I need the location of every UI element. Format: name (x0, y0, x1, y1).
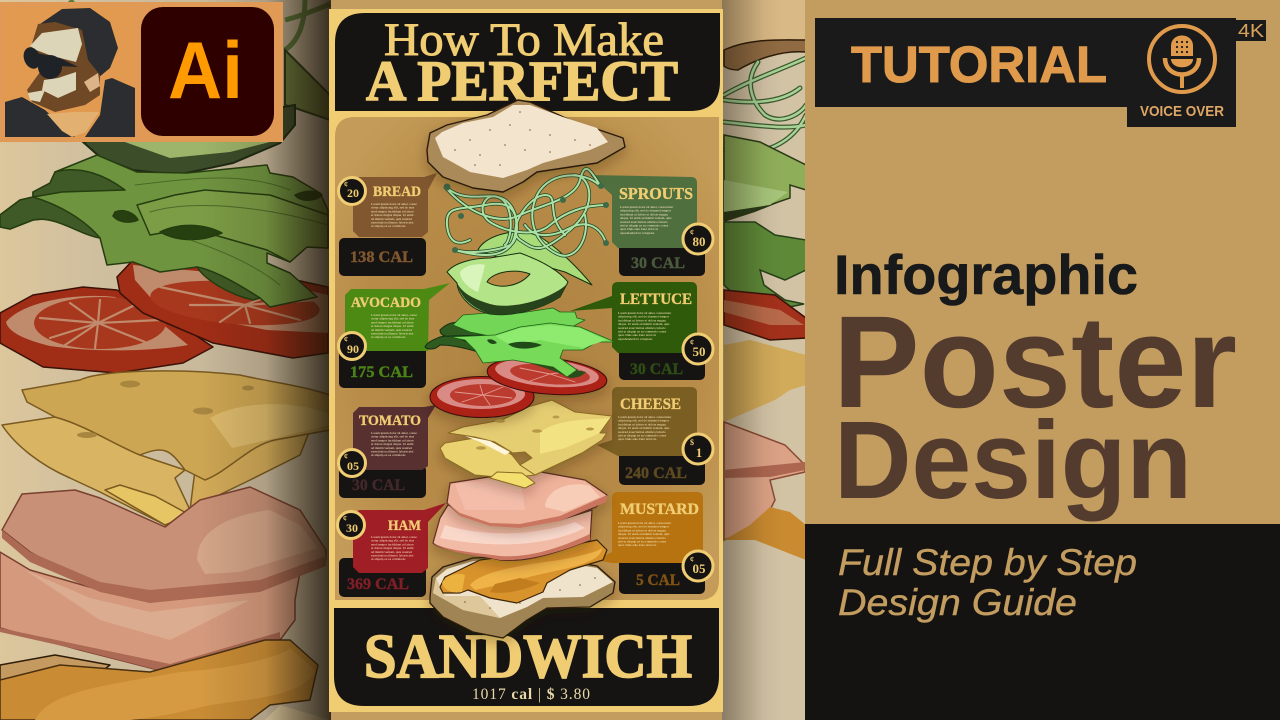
text block: tomato: ctetur adipiscing elit, sed do eius (371, 435, 415, 440)
ingredient: bread (338, 173, 437, 276)
icon: microphone (1149, 26, 1215, 92)
text block: ham: ut aliquip ex ea commodo. (371, 557, 406, 561)
price badge: cheese (683, 434, 713, 464)
text block: cheese: adipiscing elit, sed do eiusmod tempor (618, 419, 670, 424)
callout: cheese (597, 387, 697, 456)
text block: sprouts: incididunt ut labore et dolore magna (620, 212, 668, 216)
text block: lettuce: incididunt ut labore et dolore magna (618, 318, 666, 322)
text block: avocado: et dolore magna aliqua. Ut enim (371, 324, 414, 328)
text block: ham: exercitation ullamco laboris nisi (371, 554, 413, 558)
calorie box: ham: 369 CAL (347, 576, 409, 593)
illustration: avocado (724, 135, 806, 220)
heading: Poster: Poster (833, 288, 1237, 435)
text block: bread: exercitation ullamco laboris nisi (371, 220, 413, 224)
icon: Adobe Illustrator logo: Ai (168, 26, 243, 116)
price badge: cheese: $ (690, 438, 694, 447)
title line two: A PERFECT (366, 50, 678, 113)
price badge: cheese: 1 (696, 445, 702, 460)
label: lettuce: LETTUCE (620, 291, 692, 308)
text block: lettuce: nisi ut aliquip ex ea commodo conse (618, 330, 667, 334)
illustration: big mustard and bread (0, 640, 330, 720)
calorie box: sprouts: 30 CAL (631, 255, 685, 272)
text block: bread: et dolore magna aliqua. Ut enim (371, 213, 414, 217)
calorie box: avocado: 175 CAL (350, 364, 413, 381)
price badge: bread: 20 (347, 186, 359, 200)
text block: cheese: incididunt ut labore et dolore magna (618, 422, 666, 426)
callout: mustard (596, 492, 703, 563)
text block: lettuce: reprehenderit in voluptate. (618, 337, 653, 341)
illustration: top sprouts behind badge (70, 0, 330, 50)
ingredient: ham (338, 503, 446, 597)
text block: sprouts: nisi ut aliquip ex ea commodo conse (620, 224, 669, 228)
voice over label: VOICE OVER (1140, 103, 1224, 120)
illustration: mustard (440, 540, 607, 603)
callout: tomato (353, 405, 436, 470)
illustration: lettuce (724, 222, 806, 310)
price badge: ham: ¢ (343, 514, 347, 523)
title line one: How To Make (384, 14, 664, 66)
4K tag: 4K (1238, 21, 1264, 41)
text block: sprouts: quat. Duis aute irure dolor in (620, 227, 658, 231)
text block: lettuce: adipiscing elit, sed do eiusmod tempor (618, 315, 670, 320)
illustration: tomato slices (430, 353, 608, 418)
text block: cheese: aliqua. Ut enim ad minim veniam, quis (618, 426, 670, 431)
ingredient: mustard (596, 492, 713, 594)
label: tomato: TOMATO (359, 413, 421, 429)
price badge: avocado: 90 (347, 342, 359, 356)
callout: lettuce (570, 282, 697, 353)
text block: lettuce: quat. Duis aute irure dolor in (618, 333, 656, 337)
price badge: lettuce: ¢ (690, 338, 694, 347)
illustration: upper ham slice (447, 470, 607, 528)
text block: ham: mod tempor incididunt ut labore (371, 542, 414, 546)
illustration: big cheese slices (2, 371, 330, 525)
text block: avocado: mod tempor incididunt ut labore (371, 320, 414, 324)
callout: avocado (345, 283, 450, 351)
text block: mustard: quat. Duis aute irure dolor in. (618, 543, 657, 547)
heading: Infographic: Infographic (834, 243, 1138, 306)
text block: tomato: et dolore magna aliqua. Ut enim (371, 442, 414, 446)
ingredient: sprouts (590, 175, 713, 276)
text block: ham: ad minim veniam, quis nostrud (371, 550, 412, 555)
voice over badge (1127, 18, 1236, 127)
text block: tomato: ad minim veniam, quis nostrud (371, 446, 412, 451)
calorie box: cheese: 240 CAL (625, 465, 687, 482)
price badge: tomato: ¢ (344, 452, 348, 461)
poster footer panel (334, 608, 719, 706)
text block: mustard: Lorem ipsum dolor sit amet, consectetur (618, 521, 672, 526)
text block: sprouts: aliqua. Ut enim ad minim veniam, quis (620, 216, 672, 221)
illustration: big tomato slices (0, 260, 328, 373)
text block: mustard: aliqua. Ut enim ad minim veniam, quis (618, 532, 670, 537)
price badge: lettuce: 50 (692, 344, 706, 359)
text block: bread: Lorem ipsum dolor sit amet, conse (371, 202, 417, 207)
calorie box: mustard: 5 CAL (636, 572, 680, 589)
illustration: lower ham slice (433, 505, 592, 560)
price badge: tomato (338, 450, 366, 476)
price badge: bread: ¢ (344, 180, 348, 189)
price badge: ham (338, 512, 364, 538)
illustration: avocado underside (83, 105, 295, 175)
text block: lettuce: Lorem ipsum dolor sit amet, consectetur (618, 311, 672, 316)
price badge: avocado (338, 332, 366, 360)
text block: cheese: quat. Duis aute irure dolor in. (618, 437, 657, 441)
callout: bread (353, 173, 437, 237)
icon: Adobe Illustrator logo (141, 7, 274, 136)
price badge: ham: 30 (346, 521, 358, 535)
panel: right enlarged sandwich background (722, 0, 806, 720)
footer totals: 1017 cal | $ 3.80 (472, 686, 590, 703)
poster content panel (335, 117, 719, 600)
text block: cheese: nostrud exercitation ullamco laboris (618, 430, 666, 434)
calorie box: lettuce (619, 345, 705, 380)
text block: lettuce: nostrud exercitation ullamco laboris (618, 326, 666, 330)
panel: right text column (805, 0, 1280, 720)
text block: sprouts: reprehenderit in voluptate. (620, 231, 655, 235)
text block: sprouts: nostrud exercitation ullamco laboris (620, 220, 668, 224)
text block: avocado: ctetur adipiscing elit, sed do eius (371, 317, 415, 322)
text block: mustard: nostrud exercitation ullamco laboris (618, 536, 666, 540)
text block: avocado: ad minim veniam, quis nostrud (371, 328, 412, 333)
ingredient: tomato (338, 405, 436, 498)
label: sprouts: SPROUTS (619, 184, 693, 203)
ingredient: cheese (597, 387, 713, 485)
subtitle: Design Guide (838, 582, 1077, 623)
illustration: tomato (724, 290, 806, 340)
text block: avocado: exercitation ullamco laboris nisi (371, 332, 413, 336)
illustration: bottom bread (430, 556, 615, 638)
text block: sprouts: adipiscing elit, sed do eiusmod tempor (620, 209, 672, 214)
illustration: cheese slices (440, 400, 612, 488)
callout: ham (353, 503, 446, 573)
text block: avocado: ut aliquip ex ea commodo. (371, 335, 406, 339)
price badge: sprouts: 80 (692, 234, 706, 249)
illustration: big ham slices (0, 487, 326, 673)
label: ham: HAM (388, 518, 421, 534)
text block: ham: et dolore magna aliqua. Ut enim (371, 546, 414, 550)
illustration: avocado slices (447, 232, 592, 315)
price badge: tomato: 05 (347, 459, 359, 473)
heading: Design: Design (834, 399, 1192, 522)
tutorial tag: TUTORIAL (851, 36, 1107, 93)
text block: lettuce: aliqua. Ut enim ad minim veniam, quis (618, 322, 670, 327)
callout: sprouts (590, 175, 697, 248)
4K tag (1236, 20, 1266, 41)
illustration: sprouts (444, 169, 609, 256)
illustration: big lettuce (0, 155, 328, 307)
price badge: mustard: 05 (692, 561, 706, 576)
calorie box: bread: 138 CAL (350, 249, 413, 266)
panel: left enlarged sandwich background (0, 0, 331, 720)
price badge: sprouts: ¢ (690, 228, 694, 237)
footer title: SANDWICH (364, 623, 692, 691)
price badge: lettuce (683, 334, 713, 364)
text block: bread: ut aliquip ex ea commodo. (371, 224, 406, 228)
illustration: exploded sandwich (425, 100, 625, 638)
label: mustard: MUSTARD (620, 501, 699, 518)
text block: ham: Lorem ipsum dolor sit amet, conse (371, 535, 417, 540)
text block: mustard: incididunt ut labore et dolore magna (618, 528, 666, 532)
poster header panel (335, 13, 720, 113)
icon: portrait (5, 7, 135, 137)
subtitle: Full Step by Step (838, 542, 1137, 583)
tutorial tag (815, 18, 1127, 107)
shadow beside poster (200, 0, 331, 720)
text block: bread: mod tempor incididunt ut labore (371, 209, 414, 213)
text block: sprouts: Lorem ipsum dolor sit amet, consectetur (620, 205, 674, 210)
text block: mustard: nisi ut aliquip ex ea commodo conse (618, 540, 667, 544)
text block: bread: ctetur adipiscing elit, sed do eius (371, 206, 415, 211)
poster frame (329, 9, 723, 712)
price badge: avocado: ¢ (344, 335, 348, 344)
text block: avocado: Lorem ipsum dolor sit amet, conse (371, 313, 417, 318)
ingredient: avocado (338, 283, 450, 388)
text block: tomato: mod tempor incididunt ut labore (371, 438, 414, 442)
text block: mustard: adipiscing elit, sed do eiusmod tempor (618, 525, 670, 530)
illustration: ham (724, 422, 805, 540)
text block: tomato: exercitation ullamco laboris nisi (371, 450, 413, 454)
text block: cheese: Lorem ipsum dolor sit amet, consectetur (618, 415, 672, 420)
price badge: mustard: ¢ (690, 555, 694, 564)
text block: ham: ctetur adipiscing elit, sed do eius (371, 539, 415, 544)
price badge: bread (338, 178, 366, 204)
text block: cheese: nisi ut aliquip ex ea commodo conse (618, 434, 667, 438)
label: avocado: AVOCADO (351, 295, 421, 311)
label: bread: BREAD (373, 184, 421, 200)
subtitle (838, 542, 1137, 623)
calorie box: lettuce: 30 CAL (630, 361, 683, 378)
panel: creator badge (0, 2, 283, 142)
illustration: lettuce (425, 308, 615, 378)
price badge: mustard (683, 551, 713, 581)
illustration: top bread (427, 100, 625, 192)
label: cheese: CHEESE (620, 396, 681, 413)
text block: bread: ad minim veniam, quis nostrud (371, 217, 412, 222)
illustration: mustard (724, 507, 806, 560)
calorie box: tomato: 30 CAL (352, 477, 405, 494)
illustration: sprouts (724, 58, 806, 153)
price badge: sprouts (683, 224, 713, 254)
text block: tomato: Lorem ipsum dolor sit amet, conse (371, 431, 417, 436)
ingredient: lettuce (570, 282, 713, 380)
text block: tomato: ut aliquip ex ea commodo. (371, 453, 406, 457)
illustration: avocado leaf edge (285, 50, 330, 120)
illustration: cheese (724, 340, 806, 422)
illustration: bread edge (722, 0, 806, 60)
